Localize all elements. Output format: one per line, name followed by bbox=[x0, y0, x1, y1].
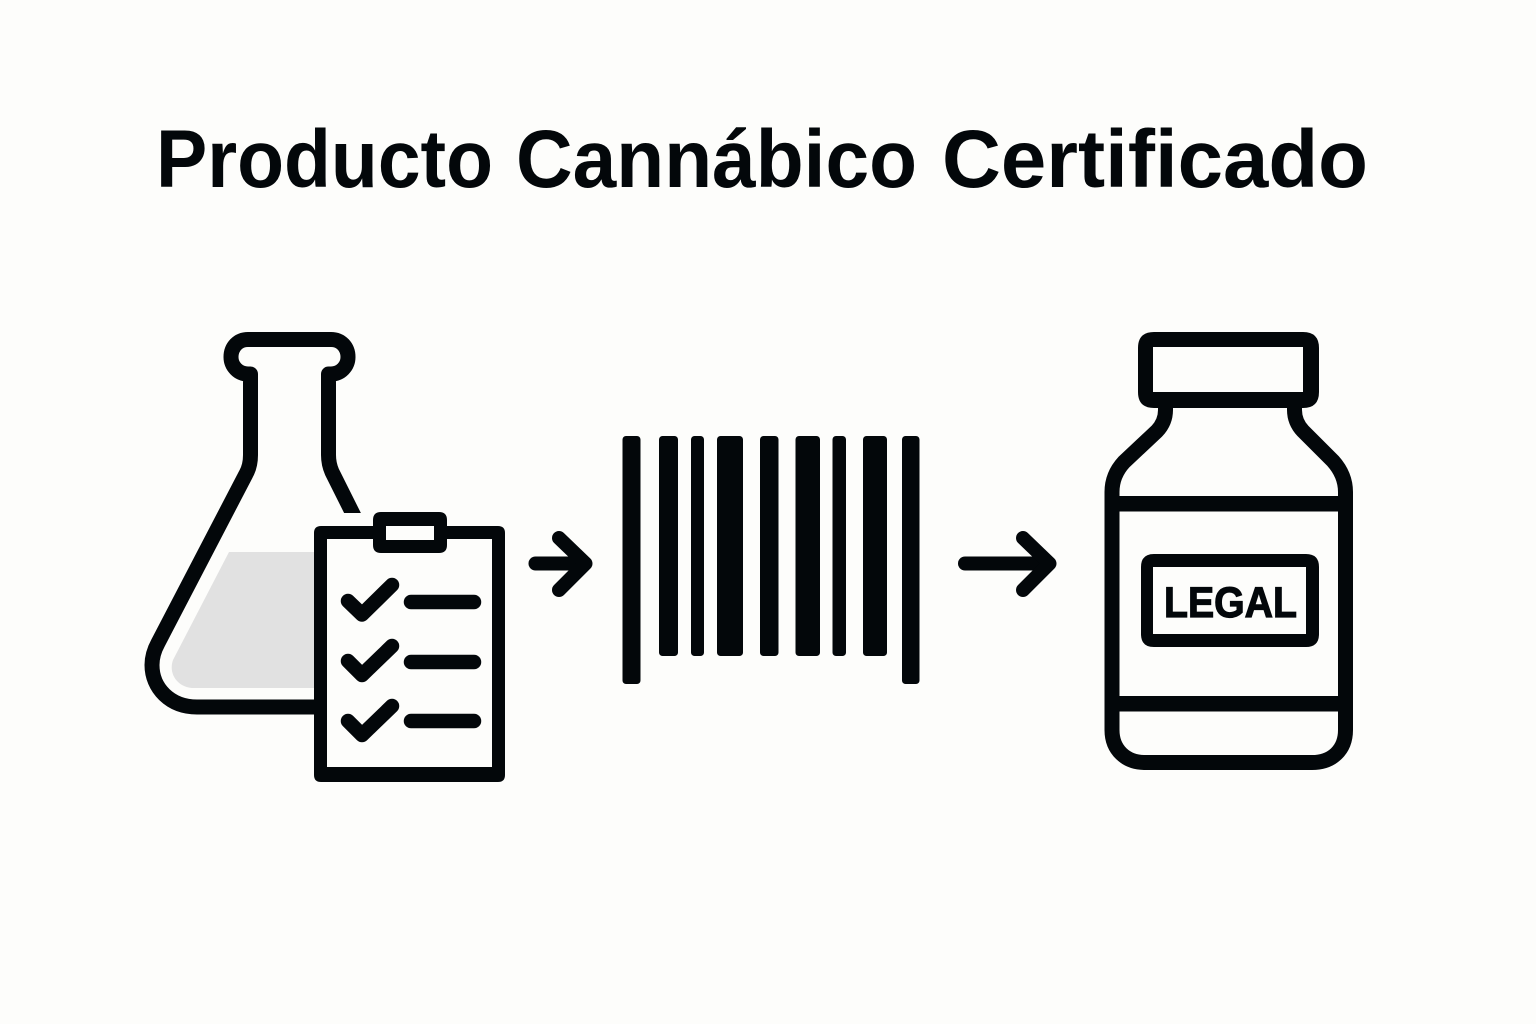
title bbox=[156, 114, 1368, 205]
title: Certificado bbox=[942, 114, 1368, 205]
legal tag bbox=[1141, 554, 1319, 647]
checklist row 3 bbox=[348, 706, 474, 735]
label lower band bbox=[1112, 696, 1346, 712]
clipboard bbox=[314, 512, 505, 782]
icon: bottle with LEGAL label bbox=[1112, 332, 1346, 762]
bottle cap bbox=[1138, 332, 1319, 408]
barcode bbox=[622, 436, 920, 684]
icon: flask with clipboard bbox=[152, 340, 505, 782]
checklist row 2 bbox=[348, 646, 474, 675]
clipboard clip bbox=[373, 512, 447, 553]
checklist row 1 bbox=[348, 585, 474, 614]
clipboard board bbox=[314, 526, 505, 782]
flask liquid bbox=[172, 552, 314, 688]
legal text: LEGAL bbox=[1164, 579, 1297, 627]
infographic canvas bbox=[144, 127, 1365, 782]
arrow: barcode to bottle bbox=[965, 538, 1050, 590]
bottle body bbox=[1112, 400, 1346, 762]
title: Producto bbox=[156, 114, 493, 205]
flask outline bbox=[152, 340, 356, 707]
title: Cannábico bbox=[516, 114, 917, 205]
arrow: flask to barcode bbox=[536, 538, 586, 590]
label upper band bbox=[1112, 496, 1346, 512]
